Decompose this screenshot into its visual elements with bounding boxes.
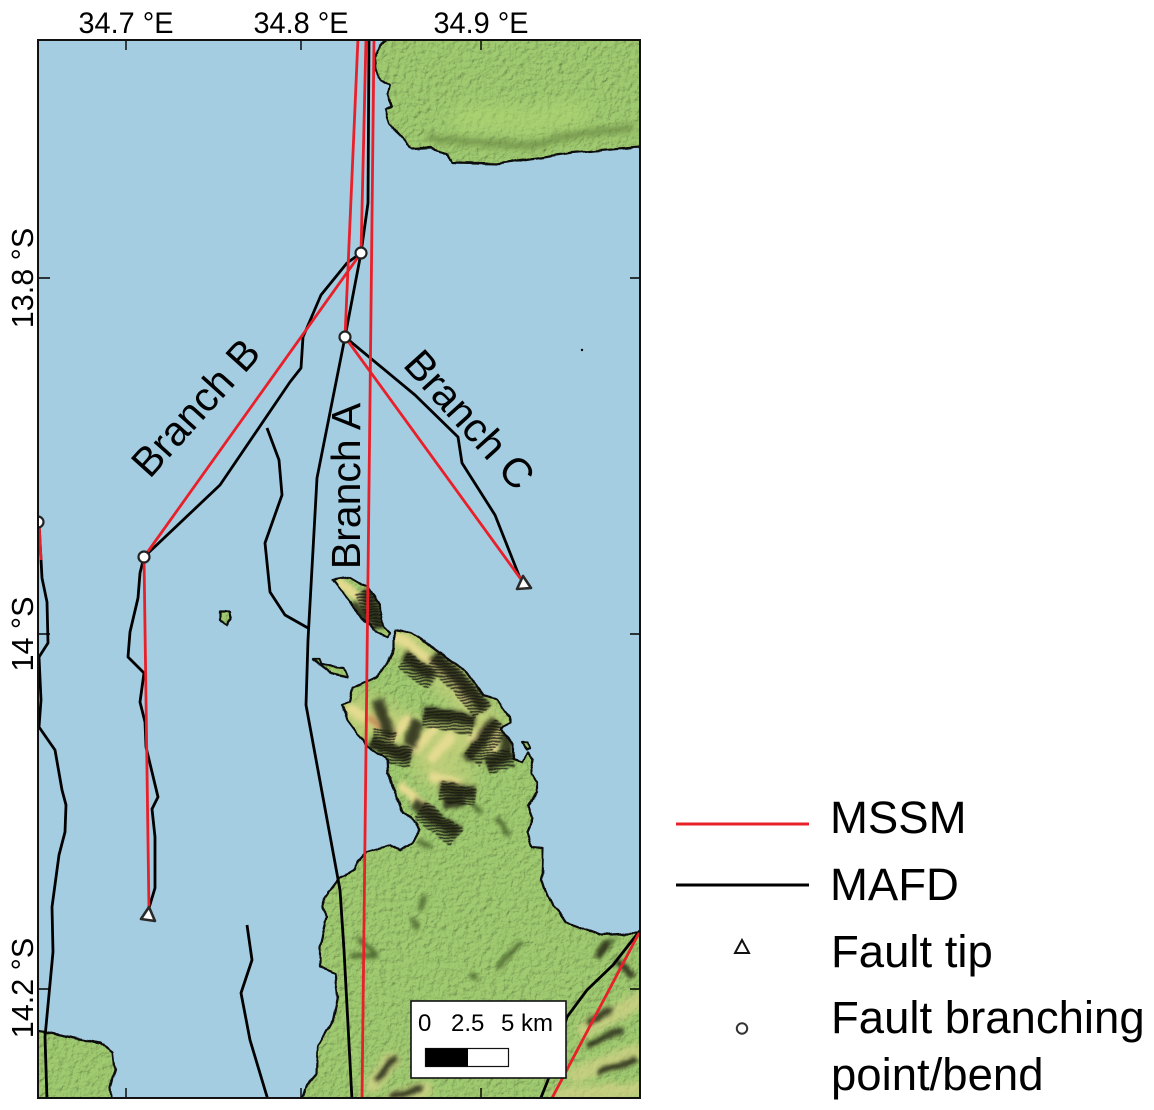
longitude labels: 34.7 °E [78,7,174,40]
latitude labels: 14 °S [6,597,40,671]
fault branching points [32,248,366,562]
map panel [30,30,650,1110]
scale bar: 5 [501,1010,514,1037]
legend: fault tip [735,926,993,977]
legend: fault branching point [737,992,1145,1100]
branch labels: Branch C [395,341,544,499]
latitude labels: 14.2 °S [6,938,40,1038]
fault tips [141,576,531,921]
coastlines [30,38,650,1110]
longitude labels: 34.9 °E [434,7,528,40]
isolated islet dot [581,349,583,351]
scale bar: 0 [418,1010,431,1037]
longitude labels [78,7,528,40]
MAFD black fault traces [39,38,638,1100]
longitude labels: 34.8 °E [254,7,348,40]
scale bar: km [521,1010,553,1037]
map frame [38,40,640,1098]
northern coast light and shadow [430,112,632,146]
legend [676,792,1145,1100]
mountain dark slopes [352,590,512,833]
legend: fault tip: Fault tip [831,926,993,977]
latitude labels [6,228,40,1038]
scale bar [411,1001,566,1078]
legend: fault branching point: Fault branching [831,992,1145,1043]
branch labels: Branch B [122,330,269,486]
water background [38,40,640,1098]
mountain pale base [360,640,490,785]
south-east hills [372,945,640,1098]
branch labels [122,330,544,569]
latitude labels: 13.8 °S [6,228,40,328]
hatched shadow rendering [364,590,512,838]
MSSM red fault traces [39,38,639,1100]
scale bar: 2.5 [451,1010,484,1037]
southern foothills [352,805,612,978]
branch labels: Branch A [323,402,369,569]
mountain light slopes [340,583,497,810]
legend: MSSM: MSSM [830,792,966,843]
land with hillshade [30,30,650,1110]
tick marks [38,40,640,1098]
legend: fault branching point: point/bend [831,1049,1044,1100]
legend: MAFD: MAFD [830,859,959,910]
